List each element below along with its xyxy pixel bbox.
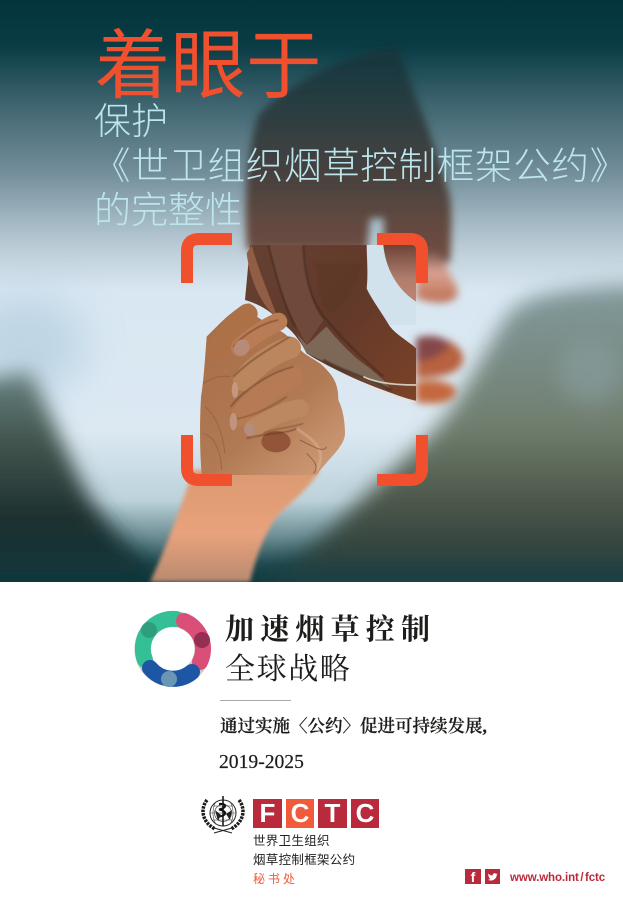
subtitle: 保护 [94,101,168,142]
strategy heading: 加速烟草控制 [225,614,436,646]
organisation name [253,834,355,866]
icon: twitter [485,869,500,884]
subtitle [93,101,623,231]
subtitle: 的完整性 [94,190,242,231]
secretariat label: 秘书处 [253,872,298,886]
organisation name: 世界卫生组织 [253,834,330,848]
FCTC logo: C [356,798,374,828]
FCTC logo [253,798,379,828]
strategy subheading: 全球战略 [225,653,351,686]
icon: facebook [465,869,481,884]
FCTC logo: C [291,798,309,828]
strategy logo ring [134,610,211,687]
hero photo: two hands on blurred background [0,0,623,582]
title: 着眼于 [95,24,322,108]
FCTC logo: T [325,798,340,828]
divider [220,700,291,701]
years: 2019-2025 [219,752,304,773]
website url: www.who.int / fctc [510,872,605,884]
FCTC logo: F [260,798,275,828]
icon: WHO emblem [201,796,245,834]
subtitle: 《世卫组织烟草控制框架公约》 [93,145,623,187]
organisation name: 烟草控制框架公约 [253,852,355,866]
strategy description: 通过实施〈公约〉促进可持续发展, [220,716,487,736]
